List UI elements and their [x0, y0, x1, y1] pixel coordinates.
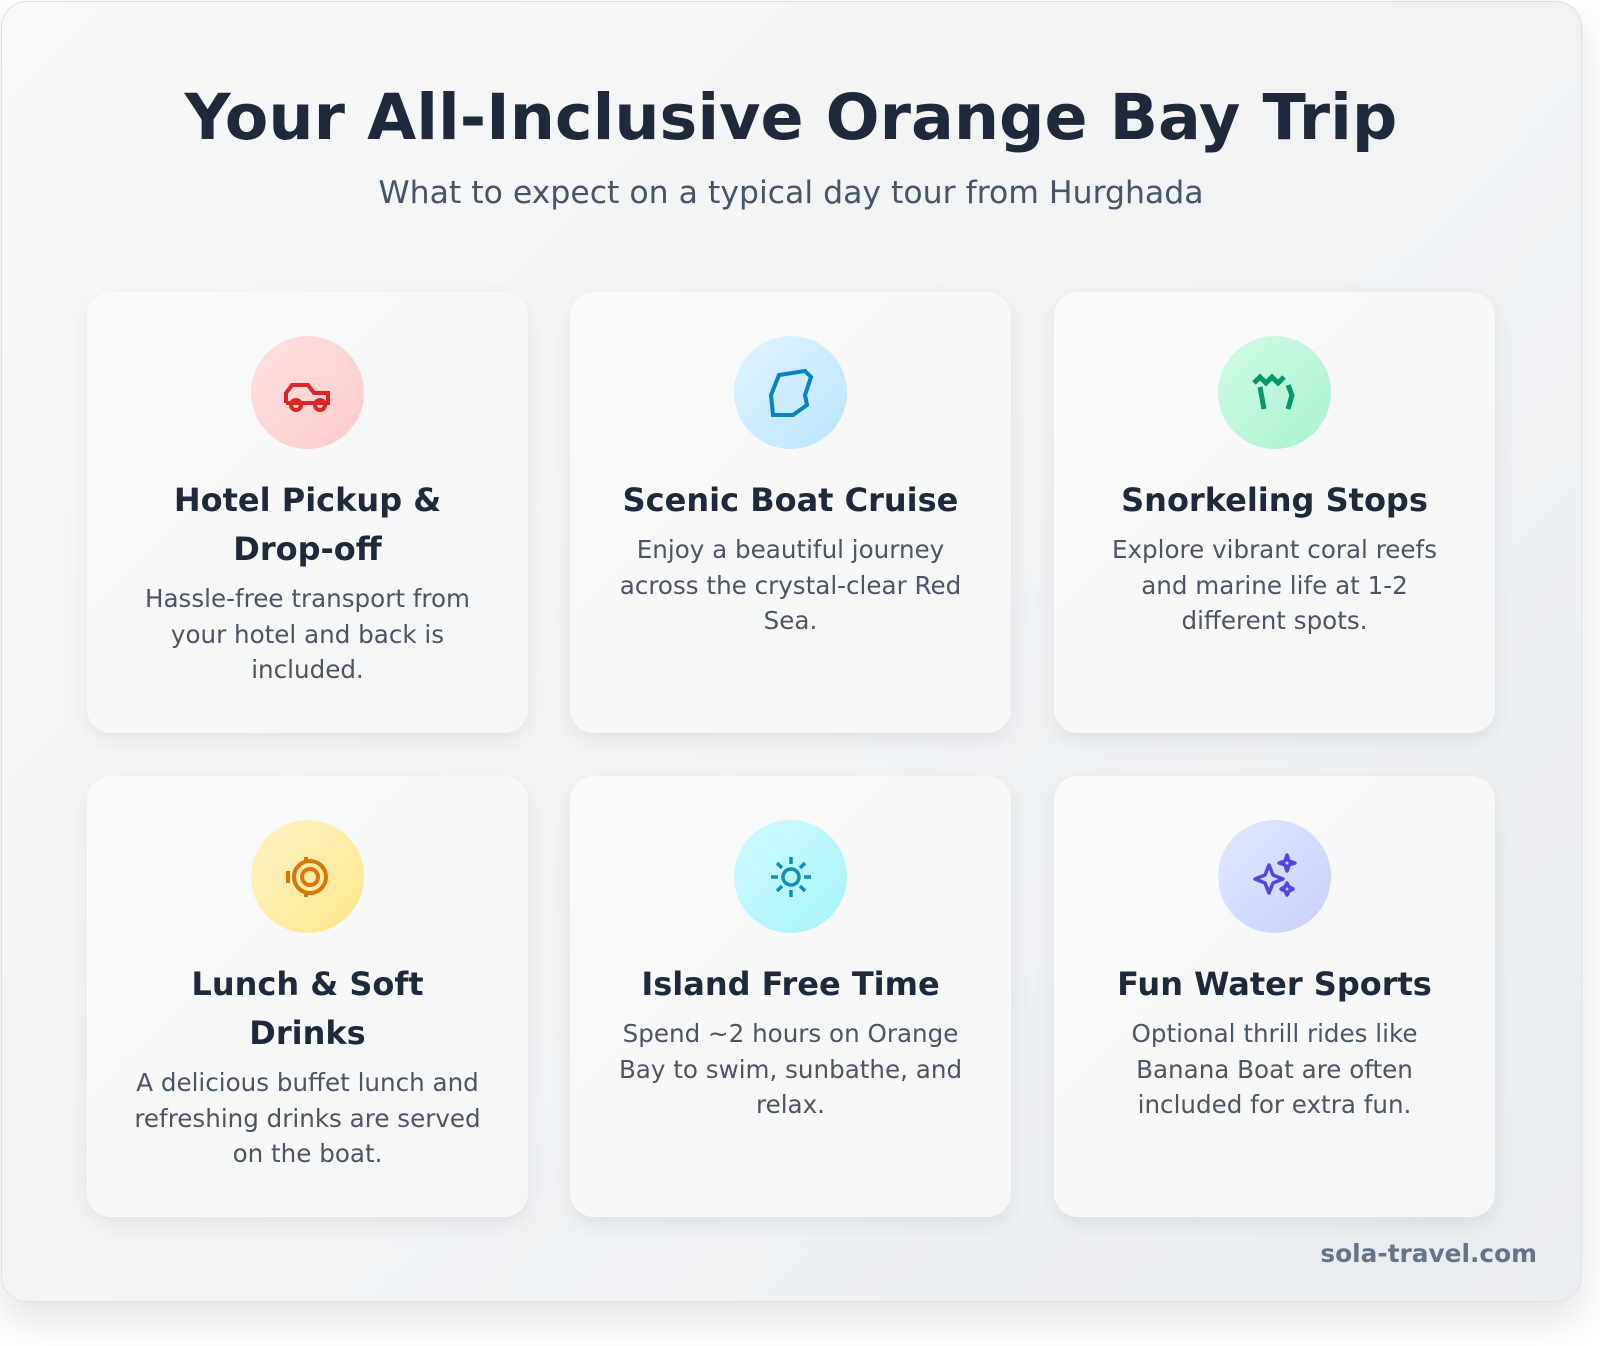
card: water sports — [1054, 776, 1495, 1217]
subtitle: What to expect on a typical day tour from Hurghada — [378, 175, 1204, 211]
icon: plate — [251, 820, 364, 933]
icon: boat — [734, 336, 847, 449]
heading + text: A delicious buffet lunch and refreshing drinks are served on the boat. — [134, 1068, 481, 1168]
icon: sparkles — [1218, 820, 1331, 933]
heading + text: Fun Water Sports — [1117, 965, 1432, 1003]
footer: source: sola-travel.com — [1320, 1239, 1537, 1268]
heading + text: Snorkeling Stops — [1121, 481, 1428, 519]
title: Your All-Inclusive Orange Bay Trip — [185, 80, 1397, 154]
heading + text: Enjoy a beautiful journey across the crystal-clear Red Sea. — [620, 535, 961, 635]
heading + text: Lunch & Soft Drinks — [191, 965, 424, 1052]
heading + text — [1117, 965, 1432, 1119]
card: snorkeling — [1054, 292, 1495, 733]
heading + text: Explore vibrant coral reefs and marine life at 1-2 different spots. — [1112, 535, 1437, 635]
heading + text: Island Free Time — [641, 965, 940, 1003]
heading + text — [145, 481, 470, 684]
heading + text: Spend ~2 hours on Orange Bay to swim, sunbathe, and relax. — [619, 1019, 962, 1119]
heading + text — [134, 965, 481, 1168]
heading + text: Optional thrill rides like Banana Boat are often included for extra fun. — [1132, 1019, 1417, 1119]
heading + text: Scenic Boat Cruise — [623, 481, 958, 519]
heading + text — [1112, 481, 1437, 635]
heading + text — [619, 965, 962, 1119]
heading + text: Hassle-free transport from your hotel and back is included. — [145, 584, 470, 684]
icon: snorkel — [1218, 336, 1331, 449]
heading + text: Hotel Pickup & Drop-off — [174, 481, 441, 568]
card: boat cruise — [570, 292, 1011, 733]
card: lunch — [87, 776, 528, 1217]
card: hotel pickup — [87, 292, 528, 733]
heading + text — [620, 481, 961, 635]
card: island time — [570, 776, 1011, 1217]
icon: car — [251, 336, 364, 449]
icon: sun — [734, 820, 847, 933]
